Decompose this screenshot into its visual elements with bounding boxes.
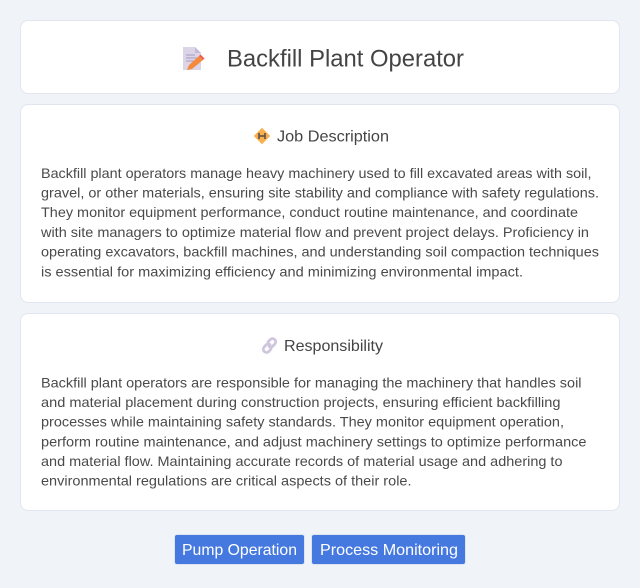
tag: process monitoring: Process Monitoring [320,542,458,559]
text block: responsibility [41,374,587,488]
text block: job description: is essential for maximizing efficiency and minimizing environmental impact. [41,263,523,279]
tag: pump operation [174,534,305,565]
icon: road sign diamond [254,128,270,144]
text block: responsibility: environmental regulations are critical aspects of their role. [41,472,412,488]
panel: job description [20,104,620,303]
icon: chain link [262,337,277,354]
text block: job description: operating excavators, backfill machines, and understanding soil compaction techniques [41,244,599,260]
icon: document with pencil [183,47,204,70]
text block: job description: with site managers to optimize material flow and prevent project delays. Proficiency in [40,224,589,240]
panel: responsibility [20,313,620,511]
tag: pump operation: Pump Operation [182,542,297,559]
text block: responsibility: perform routine maintenance, and adjust machinery settings to optimize performance [41,433,587,449]
panel: title card [20,20,620,94]
text block: job description [40,165,599,280]
text block: responsibility: processes while maintaining safety standards. They monitor equipment operation, [41,414,564,430]
text block: responsibility: and material placement during construction projects, ensuring efficient backfilling [41,394,560,410]
text block: job description: gravel, or other materials, ensuring site stability and compliance with safety regulations. [41,184,599,200]
text block: job description: Backfill plant operators manage heavy machinery used to fill excavated areas with soil, [41,165,592,181]
title: Backfill Plant Operator [227,46,464,72]
heading: job description: Job Description [277,128,389,146]
tag: process monitoring [311,534,466,565]
text block: responsibility: Backfill plant operators are responsible for managing the machinery that handles soil [41,374,582,390]
heading: responsibility: Responsibility [284,338,383,355]
text block: responsibility: and material flow. Maintaining accurate records of material usage and adhering to [41,453,563,469]
text block: job description: They monitor equipment performance, conduct routine maintenance, and coordinate [41,204,578,220]
